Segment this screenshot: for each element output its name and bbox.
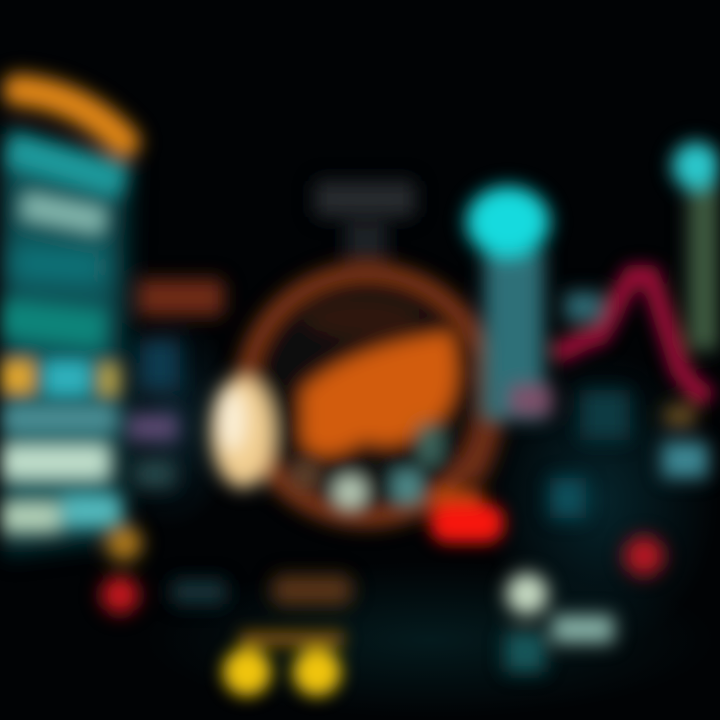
red oval (430, 503, 504, 543)
left column teal header (8, 148, 125, 182)
panel: bottom center icons (223, 575, 352, 696)
cyan cap (466, 186, 550, 258)
icon: red dot right (624, 536, 664, 576)
right data bars (550, 390, 708, 518)
teal inner icons (290, 425, 442, 510)
cream shield (211, 376, 275, 488)
bright shield center (218, 388, 246, 452)
pillar body (484, 250, 544, 420)
heading: brown label (138, 279, 224, 316)
line chart: red zigzag (555, 275, 708, 395)
yellow circle right (293, 648, 341, 696)
left column colored row (0, 361, 120, 396)
panel: bottom right label (505, 573, 614, 672)
pale text (552, 615, 614, 643)
heading: grey top label (315, 181, 415, 217)
panel: left column (0, 90, 125, 550)
brown label (272, 575, 352, 605)
icon: red dot left (101, 576, 139, 614)
left column text row (0, 406, 118, 432)
panel: cyan pillar (466, 186, 552, 420)
left column green band (0, 318, 105, 330)
small chart left of circle (128, 340, 180, 488)
left column orange arc heading (18, 90, 124, 142)
panel: far right pillar (672, 142, 720, 350)
icon: small orange marker (106, 525, 142, 561)
yellow circle left (223, 648, 271, 696)
faint label bottom left (172, 580, 226, 604)
right cyan cap (672, 142, 720, 190)
right pillar body (688, 180, 720, 350)
left column lower row (0, 496, 122, 531)
orange top bar (240, 632, 344, 646)
left column text block 2 (10, 262, 105, 268)
orange edge above red oval (432, 490, 482, 506)
background glow (100, 310, 718, 718)
teal block (505, 632, 545, 672)
panel: central circle (211, 271, 504, 543)
orange ring (243, 271, 491, 519)
left column text block 1 (22, 205, 105, 222)
dark upper crescent (304, 296, 420, 340)
pale dot (506, 573, 548, 615)
left column bright row (0, 445, 110, 479)
orange blob (300, 330, 458, 457)
pillar base pink (510, 385, 552, 415)
left column body (0, 130, 125, 550)
teal square above chart (565, 292, 603, 322)
connector stem (345, 222, 387, 260)
right ring thickening (470, 365, 490, 480)
